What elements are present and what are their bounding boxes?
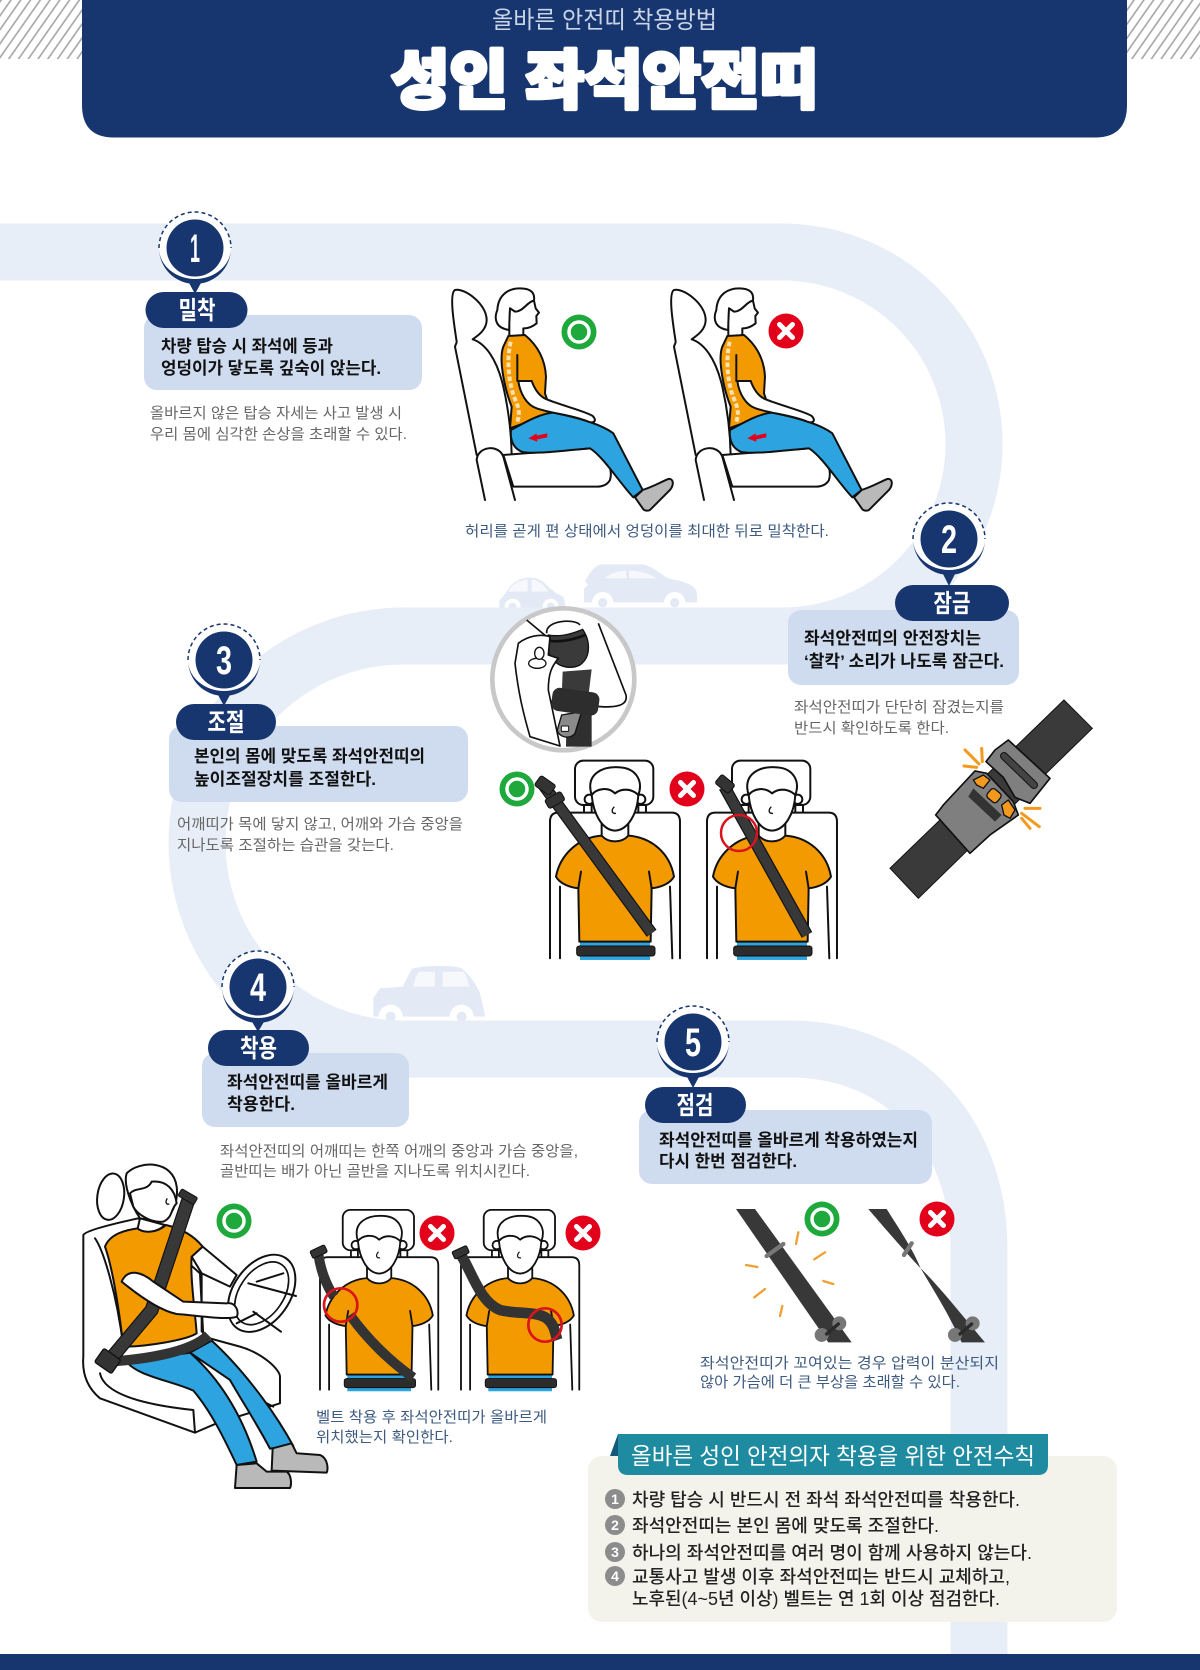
step 5 number marker	[657, 1006, 729, 1088]
car silhouette hatchback	[373, 966, 485, 1029]
illustration: driver wearing belt correctly	[83, 1165, 328, 1488]
step 3 number marker: 3	[216, 639, 232, 683]
step 2 label pill	[895, 585, 1009, 621]
car silhouette small	[499, 578, 566, 615]
step 5 text box	[639, 1110, 932, 1184]
illustration: belt under arm wrong	[310, 1210, 438, 1391]
step 4 caption: 위치했는지 확인한다.	[316, 1429, 453, 1446]
step 3 text box	[169, 726, 468, 802]
step 2 text box	[788, 610, 1019, 685]
step 3 description: 어깨띠가 목에 닿지 않고, 어깨와 가슴 중앙을	[177, 816, 463, 833]
step 3 description: 지나도록 조절하는 습관을 갖는다.	[177, 837, 394, 854]
step 5 caption	[700, 1355, 999, 1391]
step 2 number marker	[913, 503, 985, 586]
illustration: correct shoulder belt	[534, 761, 680, 960]
step 2 label pill: 잠금	[934, 590, 970, 618]
step 2 description: 반드시 확인하도록 한다.	[794, 720, 949, 737]
step 1 text box: 엉덩이가 닿도록 깊숙이 앉는다.	[161, 359, 381, 378]
illustration: twisted belt wrong	[868, 1209, 985, 1342]
step 3 description	[177, 816, 463, 854]
illustration: twisted belt path wrong	[452, 1210, 579, 1391]
step 5 caption: 않아 가슴에 더 큰 부상을 초래할 수 있다.	[700, 1374, 960, 1391]
header banner	[82, 0, 1127, 138]
hatch pattern right corner	[1125, 0, 1200, 59]
step 5 panel	[639, 1006, 999, 1391]
step 4 caption	[316, 1409, 547, 1446]
step 5 text box: 다시 한번 점검한다.	[659, 1152, 797, 1171]
step 2 panel	[788, 503, 1092, 898]
icon: wrong mark	[566, 1216, 600, 1250]
winding road background	[0, 252, 979, 1660]
step 2 text box: ‘찰칵’ 소리가 나도록 잠근다.	[804, 652, 1004, 671]
step 5 label pill	[645, 1087, 746, 1123]
step 4 number marker	[222, 951, 294, 1032]
title: 성인 좌석안전띠	[391, 45, 818, 117]
step 3 label pill: 조절	[208, 709, 244, 737]
icon: wrong mark	[768, 314, 804, 348]
icon: correct mark	[562, 314, 596, 350]
rule 1: 1	[611, 1491, 619, 1507]
step 2 description	[794, 699, 1004, 737]
step 2 number marker: 2	[941, 518, 957, 562]
illustration: correct seated posture	[452, 288, 673, 511]
subtitle: 올바른 안전띠 착용방법	[492, 7, 717, 34]
step 3 panel	[169, 608, 837, 960]
illustration: buckle click	[890, 700, 1092, 898]
illustration: height adjuster in circle	[492, 608, 634, 750]
step 1 number marker	[159, 212, 231, 294]
rule 3: 3	[611, 1544, 619, 1560]
hatch pattern left corner	[0, 0, 84, 59]
rule 3: 하나의 좌석안전띠를 여러 명이 함께 사용하지 않는다.	[632, 1543, 1032, 1563]
rule 4	[605, 1566, 1010, 1609]
icon: wrong mark	[670, 772, 704, 806]
step 3 number marker	[188, 624, 260, 706]
safety rules heading banner: 올바른 성인 안전의자 착용을 위한 안전수칙	[631, 1443, 1035, 1469]
rule 1: 차량 탑승 시 반드시 전 좌석 좌석안전띠를 착용한다.	[632, 1490, 1020, 1510]
step 2 description: 좌석안전띠가 단단히 잠겼는지를	[794, 699, 1004, 716]
car silhouette sedan	[584, 564, 697, 613]
step 1 text box	[144, 315, 422, 390]
step 1 description: 우리 몸에 심각한 손상을 초래할 수 있다.	[150, 426, 407, 443]
illustration: incorrect shoulder belt on neck	[707, 761, 837, 960]
step 1 description: 올바르지 않은 탑승 자세는 사고 발생 시	[150, 405, 402, 422]
icon: correct mark	[216, 1204, 252, 1238]
step 1 label pill	[146, 292, 248, 328]
footer band	[0, 1654, 1200, 1670]
rule 2: 좌석안전띠는 본인 몸에 맞도록 조절한다.	[632, 1516, 939, 1536]
step 4 text box	[202, 1053, 409, 1127]
step 4 panel	[83, 951, 600, 1488]
step 2 text box: 좌석안전띠의 안전장치는	[804, 629, 981, 648]
illustration: flat belt correct	[736, 1209, 852, 1342]
icon: correct mark	[804, 1202, 840, 1236]
step 4 caption: 벨트 착용 후 좌석안전띠가 올바르게	[316, 1409, 547, 1426]
step 1 text box: 차량 탑승 시 좌석에 등과	[161, 337, 333, 356]
rule 4: 교통사고 발생 이후 좌석안전띠는 반드시 교체하고,	[632, 1567, 1010, 1587]
step 3 text box: 본인의 몸에 맞도록 좌석안전띠의	[194, 747, 425, 766]
step 1 label pill: 밀착	[178, 297, 216, 325]
step 5 number marker: 5	[685, 1021, 701, 1065]
step 5 label pill: 점검	[676, 1092, 714, 1120]
step 3 label pill	[176, 704, 276, 740]
step 1 description	[150, 405, 407, 443]
icon: wrong mark	[420, 1216, 454, 1250]
step 5 text box: 좌석안전띠를 올바르게 착용하였는지	[659, 1131, 918, 1150]
step 4 description: 좌석안전띠의 어깨띠는 한쪽 어깨의 중앙과 가슴 중앙을,	[220, 1143, 578, 1160]
rule 4: 노후된(4~5년 이상) 벨트는 연 1회 이상 점검한다.	[632, 1589, 1000, 1609]
step 3 text box: 높이조절장치를 조절한다.	[194, 770, 376, 789]
icon: correct mark	[500, 772, 534, 806]
step 4 number marker: 4	[250, 966, 267, 1010]
step 1 number marker: 1	[190, 227, 200, 271]
step 4 text box: 착용한다.	[227, 1095, 295, 1114]
safety rules panel	[588, 1434, 1117, 1622]
step 1 caption: 허리를 곧게 편 상태에서 엉덩이를 최대한 뒤로 밀착한다.	[465, 523, 829, 540]
step 4 text box: 좌석안전띠를 올바르게	[227, 1073, 388, 1092]
icon: wrong mark	[920, 1202, 954, 1236]
step 4 label pill	[208, 1030, 309, 1066]
rule 2: 2	[611, 1517, 619, 1533]
illustration: incorrect seated posture	[671, 288, 892, 511]
step 4 description: 골반띠는 배가 아닌 골반을 지나도록 위치시킨다.	[220, 1163, 530, 1180]
step 4 description	[220, 1143, 578, 1180]
step 4 label pill: 착용	[240, 1035, 277, 1063]
safety rules heading banner	[610, 1434, 1048, 1475]
step 1 panel	[144, 212, 892, 540]
rule 4: 4	[611, 1568, 619, 1584]
step 5 caption: 좌석안전띠가 꼬여있는 경우 압력이 분산되지	[700, 1355, 999, 1372]
